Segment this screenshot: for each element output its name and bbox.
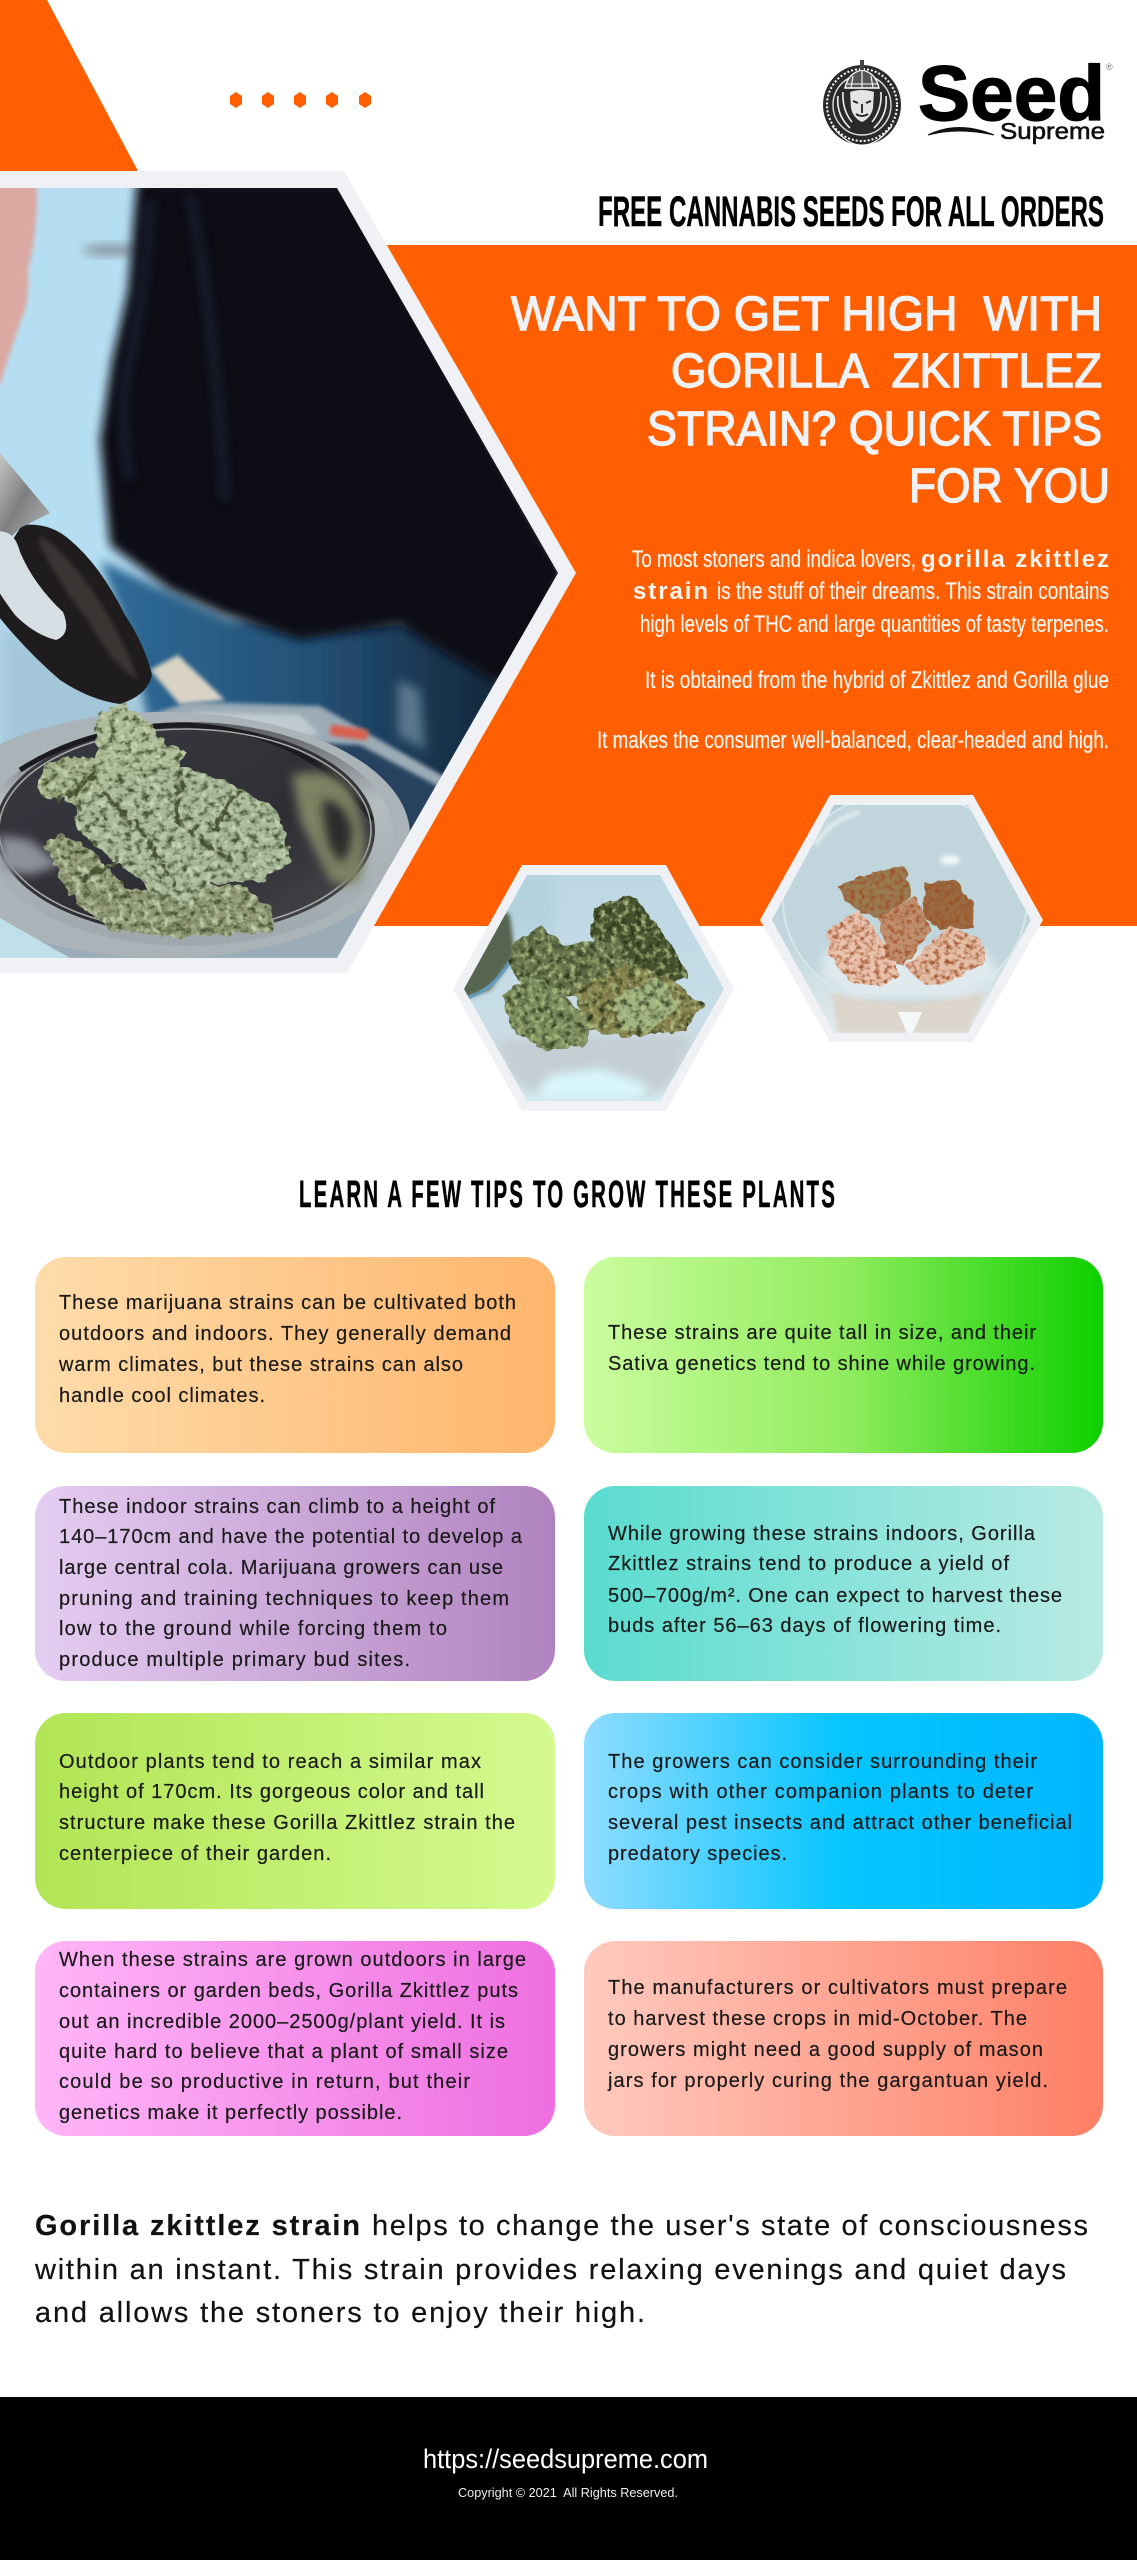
- photo: background shadow: [82, 244, 138, 256]
- photo: bowl stem: [898, 1012, 922, 1033]
- card: outdoor plants: [35, 1713, 555, 1909]
- photo: scale body: [40, 700, 443, 958]
- icon: lion emblem: [823, 60, 901, 145]
- card: tall sativa genetics: These strains are quite tall in size, and their: [608, 1322, 1036, 1344]
- photo: plate: [0, 725, 375, 935]
- photo: jeans: [100, 560, 500, 800]
- photo: orange buds in glass bowl: [772, 805, 1031, 1033]
- card: companion plants: crops with other companion plants to deter: [608, 1781, 1033, 1803]
- card: indoor yield: buds after 56–63 days of flowering time.: [608, 1615, 1001, 1637]
- footer: [0, 2397, 1137, 2560]
- card: indoor height and training: produce multiple primary bud sites.: [59, 1649, 410, 1671]
- card: outdoor plants: Outdoor plants tend to reach a similar max: [59, 1751, 481, 1773]
- card: companion plants: The growers can consider surrounding their: [608, 1751, 1037, 1773]
- text block: hero intro: gorilla zkittlez: [921, 546, 1109, 573]
- photo: cannabis bud: [40, 706, 290, 938]
- photo: scale red light: [329, 724, 369, 741]
- text block: hero intro: strain: [633, 578, 708, 605]
- card: outdoor plants: centerpiece of their garden.: [59, 1843, 331, 1865]
- card: harvest time: growers might need a good supply of mason: [608, 2039, 1043, 2061]
- card: outdoor yield: genetics make it perfectly possible.: [59, 2102, 402, 2124]
- card: indoor height and training: pruning and training techniques to keep them: [59, 1588, 509, 1610]
- photo: lower corner: [0, 918, 70, 958]
- heading: hero title: WANT TO GET HIGH WITH: [511, 288, 1102, 341]
- photo: bowl in background: [460, 905, 515, 1000]
- registered mark: ®: [1106, 62, 1113, 72]
- card: indoor yield: While growing these strains indoors, Gorilla: [608, 1523, 1036, 1545]
- photo: scale keypad: [190, 712, 320, 735]
- card: harvest time: [584, 1941, 1103, 2136]
- card: companion plants: predatory species.: [608, 1843, 787, 1865]
- photo: tag: [150, 655, 225, 705]
- card: cultivation climates: outdoors and indoors. They generally demand: [59, 1323, 511, 1345]
- photo: glove: [0, 525, 152, 704]
- text block: closing paragraph: [34, 2210, 1088, 2329]
- photo: buds: [828, 866, 986, 987]
- card: indoor height and training: low to the ground while forcing them to: [59, 1618, 447, 1640]
- text block: closing paragraph: and allows the stoners to enjoy their high.: [35, 2297, 645, 2329]
- card: outdoor yield: could be so productive in return, but their: [59, 2071, 470, 2093]
- card: companion plants: several pest insects and attract other beneficial: [608, 1812, 1072, 1834]
- photo: plate reflection: [292, 772, 364, 885]
- card: cultivation climates: These marijuana strains can be cultivated both: [59, 1292, 516, 1314]
- card: indoor height and training: [35, 1486, 555, 1681]
- card: cultivation climates: [35, 1257, 555, 1453]
- card: indoor height and training: These indoor strains can climb to a height of: [59, 1496, 495, 1518]
- card: indoor height and training: large central cola. Marijuana growers can use: [59, 1557, 503, 1579]
- heading: hero title: [511, 288, 1110, 513]
- photo: table reflection: [500, 1035, 690, 1101]
- photo: plate base: [0, 712, 410, 958]
- photo: tongs handle highlight: [0, 531, 66, 640]
- card: indoor yield: Zkittlez strains tend to produce a yield of: [608, 1553, 1009, 1575]
- card: tall sativa genetics: Sativa genetics tend to shine while growing.: [608, 1353, 1035, 1375]
- photo: bowl bottom: [820, 950, 1000, 1000]
- heading: hero title: FOR YOU: [909, 460, 1110, 513]
- photo: green buds on white: [460, 870, 730, 1105]
- card: companion plants: [584, 1713, 1103, 1909]
- corner triangle: [0, 0, 138, 171]
- heading: hero title: STRAIN? QUICK TIPS: [647, 403, 1102, 456]
- logo swoosh: [928, 128, 994, 135]
- photo: weighing bud on scale: [0, 180, 565, 960]
- frame: big hexagon: [0, 171, 576, 973]
- photo: shirt folds: [123, 195, 225, 500]
- card: outdoor yield: [35, 1941, 555, 2136]
- logo: Seed Supreme: [823, 49, 1113, 145]
- card: outdoor plants: height of 170cm. Its gorgeous color and tall: [59, 1781, 484, 1803]
- photo: glass bowl: [783, 792, 1027, 1008]
- text block: closing paragraph: Gorilla zkittlez strain: [35, 2210, 360, 2242]
- photo: light lower background: [0, 624, 146, 744]
- card: cultivation climates: handle cool climates.: [59, 1385, 265, 1407]
- card: cultivation climates: warm climates, but these strains can also: [58, 1354, 463, 1376]
- card: outdoor yield: quite hard to believe that a plant of small size: [59, 2041, 508, 2063]
- card: indoor height and training: 140–170cm and have the potential to develop a: [59, 1526, 523, 1548]
- card: outdoor yield: When these strains are grown outdoors in large: [59, 1949, 526, 1971]
- card: harvest time: The manufacturers or cultivators must prepare: [608, 1977, 1067, 1999]
- card: outdoor yield: out an incredible 2000–2500g/plant yield. It is: [59, 2011, 505, 2033]
- photo: table below: [831, 992, 985, 1033]
- frame: small hexagon two: [760, 795, 1043, 1042]
- card: outdoor plants: structure make these Gorilla Zkittlez strain the: [59, 1812, 515, 1834]
- photo: scale surface left: [0, 720, 180, 800]
- frame: small hexagon one: [453, 865, 734, 1111]
- decorative hexagon dots: [230, 92, 371, 108]
- photo: scale display: [322, 740, 438, 864]
- footer copyright: Copyright © 2021 All Rights Reserved.: [458, 2486, 678, 2500]
- photo: background shadow strip: [506, 878, 552, 934]
- card: harvest time: to harvest these crops in mid-October. The: [608, 2008, 1027, 2030]
- card: indoor yield: [584, 1486, 1103, 1681]
- photo: plate rim: [0, 722, 393, 946]
- photo: buds: [503, 895, 703, 1050]
- photo: tongs steel: [0, 453, 50, 536]
- heading: hero title: GORILLA ZKITTLEZ: [671, 345, 1102, 398]
- card: harvest time: jars for properly curing the gargantuan yield.: [607, 2070, 1048, 2092]
- text block: closing paragraph: helps to change the user's state of consciousness: [372, 2210, 1088, 2242]
- photo: jeans highlight: [398, 680, 425, 750]
- card: indoor yield: 500–700g/m². One can expect to harvest these: [608, 1585, 1062, 1607]
- photo: fingertip: [0, 185, 37, 385]
- text block: hero intro: [597, 546, 1109, 754]
- footer url: https://seedsupreme.com: [423, 2444, 708, 2474]
- panel: orange hero background: [300, 245, 1137, 926]
- text block: closing paragraph: within an instant. This strain provides relaxing evenings and quiet days: [34, 2254, 1066, 2286]
- text block: hero intro: To most stoners and indica lovers,: [632, 546, 916, 573]
- card: tall sativa genetics: [584, 1257, 1103, 1453]
- logo subtitle: Supreme: [1000, 118, 1105, 144]
- photo: dark shirt: [100, 180, 565, 690]
- logo wordmark: Seed: [918, 49, 1105, 137]
- card: outdoor yield: containers or garden beds, Gorilla Zkittlez puts: [59, 1980, 518, 2002]
